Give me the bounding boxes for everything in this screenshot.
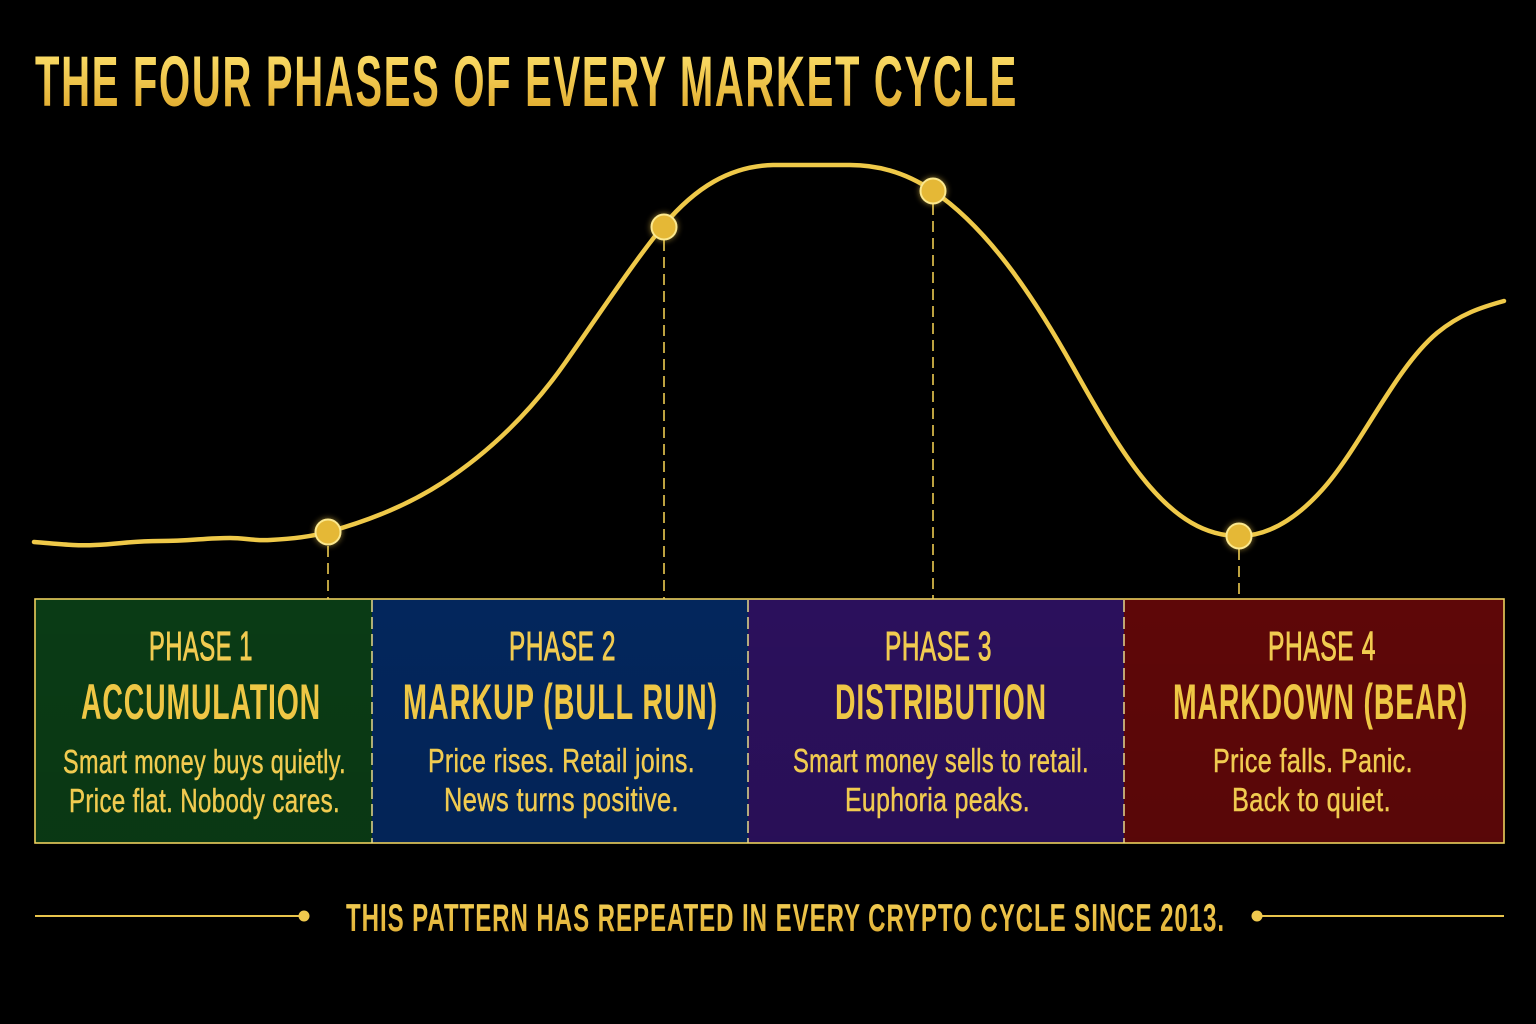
panel: phase 3 distribution: Smart money sells to retail. [793, 742, 1089, 779]
price cycle chart [34, 165, 1504, 599]
panel: phase 2 markup: Price rises. Retail joins. [428, 742, 695, 779]
panel: phase 3 distribution: Euphoria peaks. [845, 781, 1030, 818]
panel: phase 3 distribution: PHASE 3 [885, 623, 992, 669]
marker: phase 2 [650, 213, 678, 241]
panel: phase 1 accumulation: Price flat. Nobody cares. [69, 782, 340, 819]
panel: phase 4 markdown: Price falls. Panic. [1213, 742, 1413, 779]
panel: phase 1 accumulation: ACCUMULATION [81, 674, 321, 730]
panel: phase 3 distribution [748, 599, 1124, 843]
panel: phase 1 accumulation: PHASE 1 [149, 623, 253, 669]
panel: phase 1 accumulation: Smart money buys quietly. [63, 743, 346, 780]
panel: phase 2 markup: News turns positive. [444, 781, 679, 818]
price curve [34, 165, 1504, 545]
marker: phase 3 [919, 177, 947, 205]
panel: phase 4 markdown [1124, 599, 1504, 843]
panel: phase 2 markup: MARKUP (BULL RUN) [403, 674, 718, 730]
panel: phase 2 markup: PHASE 2 [509, 623, 616, 669]
panel: phase 2 markup [372, 599, 748, 843]
dashed drop lines [328, 204, 1239, 599]
panel: phase 4 markdown: Back to quiet. [1232, 781, 1391, 818]
panel: phase 3 distribution: DISTRIBUTION [835, 674, 1047, 730]
panel: phase 4 markdown: PHASE 4 [1268, 623, 1376, 669]
panel: phase 1 accumulation [35, 599, 372, 843]
marker: phase 1 [314, 518, 342, 546]
marker: phase 4 [1225, 522, 1253, 550]
